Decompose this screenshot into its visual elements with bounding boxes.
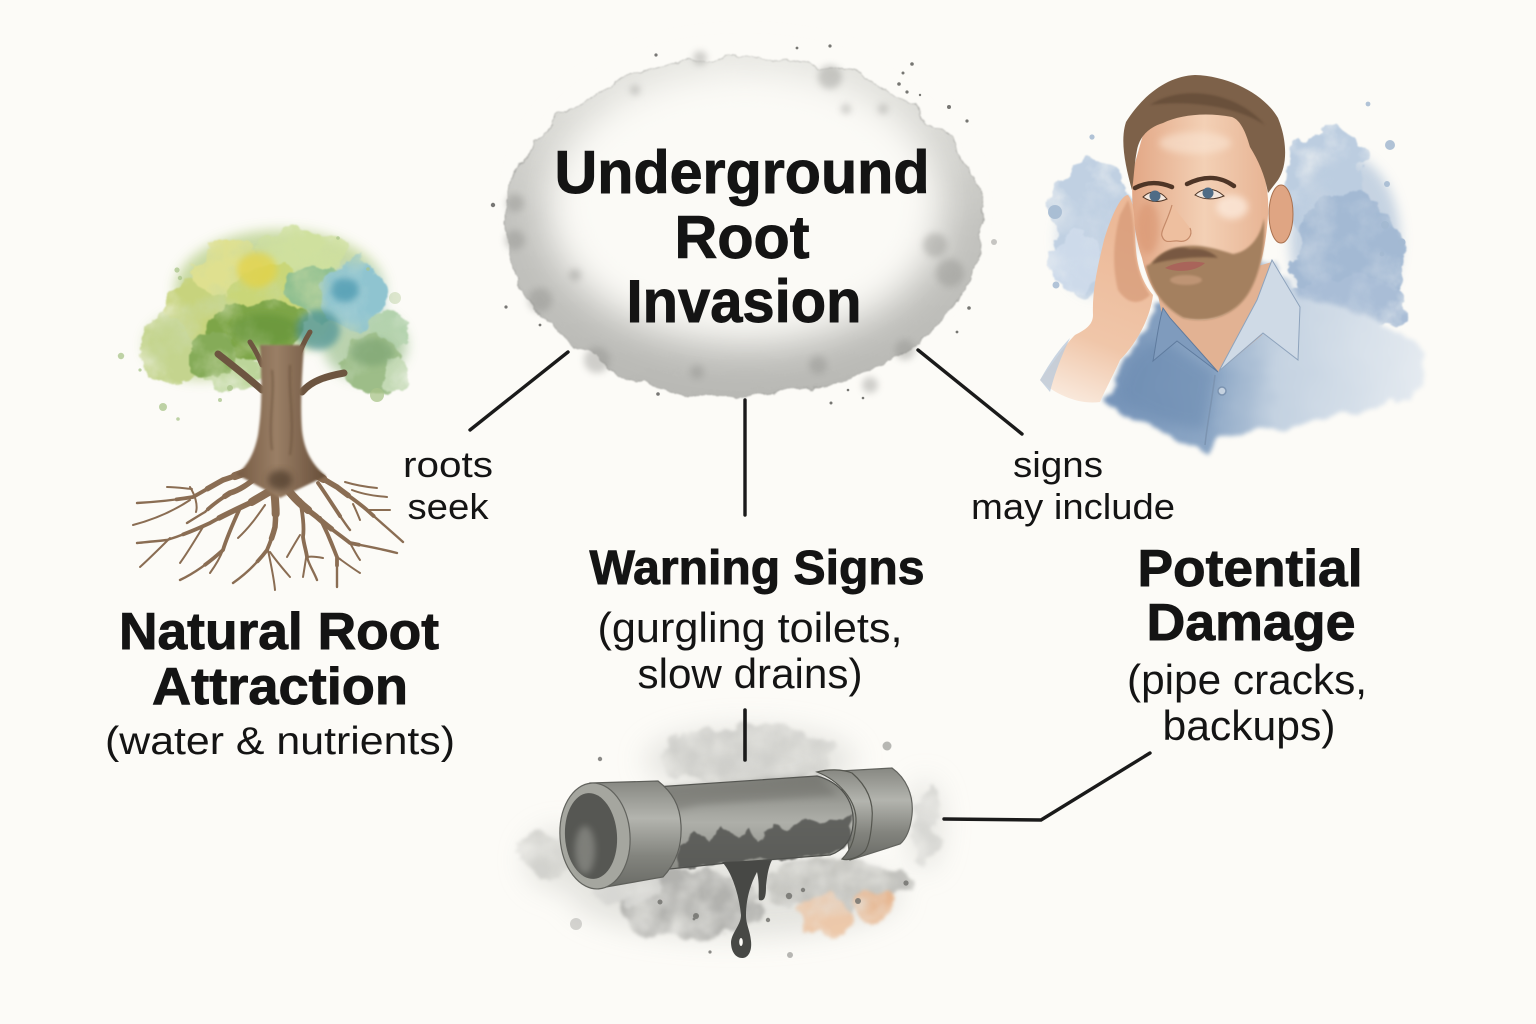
heading: warning signs: Warning Signs: [590, 542, 924, 595]
paint speckles: [118, 236, 401, 421]
central node: Underground Root Invasion: [491, 44, 997, 405]
connector: center to warning signs: [743, 400, 747, 515]
hair: [1123, 75, 1285, 193]
right pipe end: [840, 768, 912, 860]
title text: [554, 139, 930, 335]
leak drip: [722, 860, 772, 958]
hand and arm: [1040, 195, 1153, 403]
heading: natural root attraction: Attraction: [152, 658, 408, 716]
pipe body top shade: [662, 777, 838, 812]
thin root tips: [133, 482, 390, 590]
placket line and button: [1205, 375, 1226, 445]
branches: [218, 332, 344, 392]
heading: natural root attraction: Natural Root: [119, 603, 439, 661]
label: signs may include: signs: [1013, 444, 1103, 485]
pipe band: [817, 770, 872, 860]
heading: natural root attraction: [105, 603, 455, 763]
label: signs may include: may include: [971, 486, 1175, 527]
pipe body dark lower wash: [677, 815, 852, 868]
left collar: [590, 781, 681, 888]
heading: potential damage: backups): [1162, 702, 1336, 749]
splash speckles: [1048, 102, 1406, 288]
roots: [133, 465, 403, 590]
forehead highlight: [1159, 132, 1231, 154]
heading: warning signs: slow drains): [638, 650, 862, 697]
neck: [1158, 262, 1272, 372]
heading: natural root attraction: (water & nutrients): [105, 720, 455, 763]
foliage colour accents: [231, 252, 394, 366]
lower lip shadow: [1170, 275, 1202, 285]
tapered main roots, thick layer: [137, 465, 403, 583]
blue watercolor splash: [1047, 125, 1407, 335]
label: roots seek: [403, 444, 493, 527]
icon: tree with roots: [118, 227, 414, 590]
icon: worried man holding ear: [1040, 75, 1427, 450]
label: roots seek: roots: [403, 444, 493, 485]
trunk: [236, 345, 326, 498]
moustache: [1152, 248, 1218, 264]
splash underlay: [1057, 155, 1400, 325]
pipe specks: [570, 742, 909, 958]
nose: [1162, 205, 1191, 242]
sleeve: [1040, 338, 1070, 392]
beard: [1146, 218, 1264, 320]
pipe opening interior: [562, 791, 620, 881]
label: signs may include: [971, 444, 1175, 527]
watercolor blob: [491, 44, 997, 405]
heading: warning signs: [590, 542, 924, 697]
interior highlight: [575, 826, 595, 874]
pipe opening rim: [556, 781, 634, 891]
heading: potential damage: Potential: [1138, 540, 1362, 598]
hair streaks: [1150, 93, 1265, 125]
connector: center to signs may include: [918, 350, 1022, 434]
shirt: [1103, 260, 1427, 450]
trunk bark marks: [271, 365, 292, 455]
left collar: [1153, 308, 1218, 372]
drip highlight: [739, 938, 743, 946]
mouth: [1165, 262, 1205, 271]
right collar: [1219, 260, 1300, 371]
title text: Root: [674, 204, 810, 271]
tapered main roots, medium layer: [137, 465, 403, 587]
tapered main roots, base layer: [137, 465, 403, 583]
cheek highlight: [1216, 195, 1248, 219]
icon: leaking pipe: [517, 725, 941, 958]
tapered main roots, thin layer: [137, 465, 403, 587]
root knot: [268, 470, 292, 490]
shirt dark patch: [1120, 342, 1215, 430]
title text: Invasion: [626, 268, 862, 335]
eyes and brows: [1135, 178, 1234, 202]
face: [1132, 105, 1268, 320]
title text: Underground: [554, 139, 930, 206]
tree foliage: [139, 227, 414, 393]
heading: potential damage: Damage: [1146, 594, 1356, 652]
soft grey underlay: [526, 728, 941, 937]
heading: warning signs: (gurgling toilets,: [598, 604, 902, 651]
foliage underlay: [145, 230, 407, 380]
heading: potential damage: [1127, 540, 1367, 749]
connector: pipe to potential damage: [944, 753, 1150, 820]
ear: [1269, 185, 1293, 243]
heading: potential damage: (pipe cracks,: [1127, 656, 1367, 703]
connector: warning signs to pipe: [743, 710, 747, 760]
connector: center to roots seek: [470, 352, 568, 430]
cheek shade: [1137, 202, 1159, 254]
pipe body: [655, 776, 853, 869]
label: roots seek: seek: [408, 486, 490, 527]
pipe watercolor wash: [517, 725, 939, 939]
hand shadow: [1114, 200, 1150, 302]
